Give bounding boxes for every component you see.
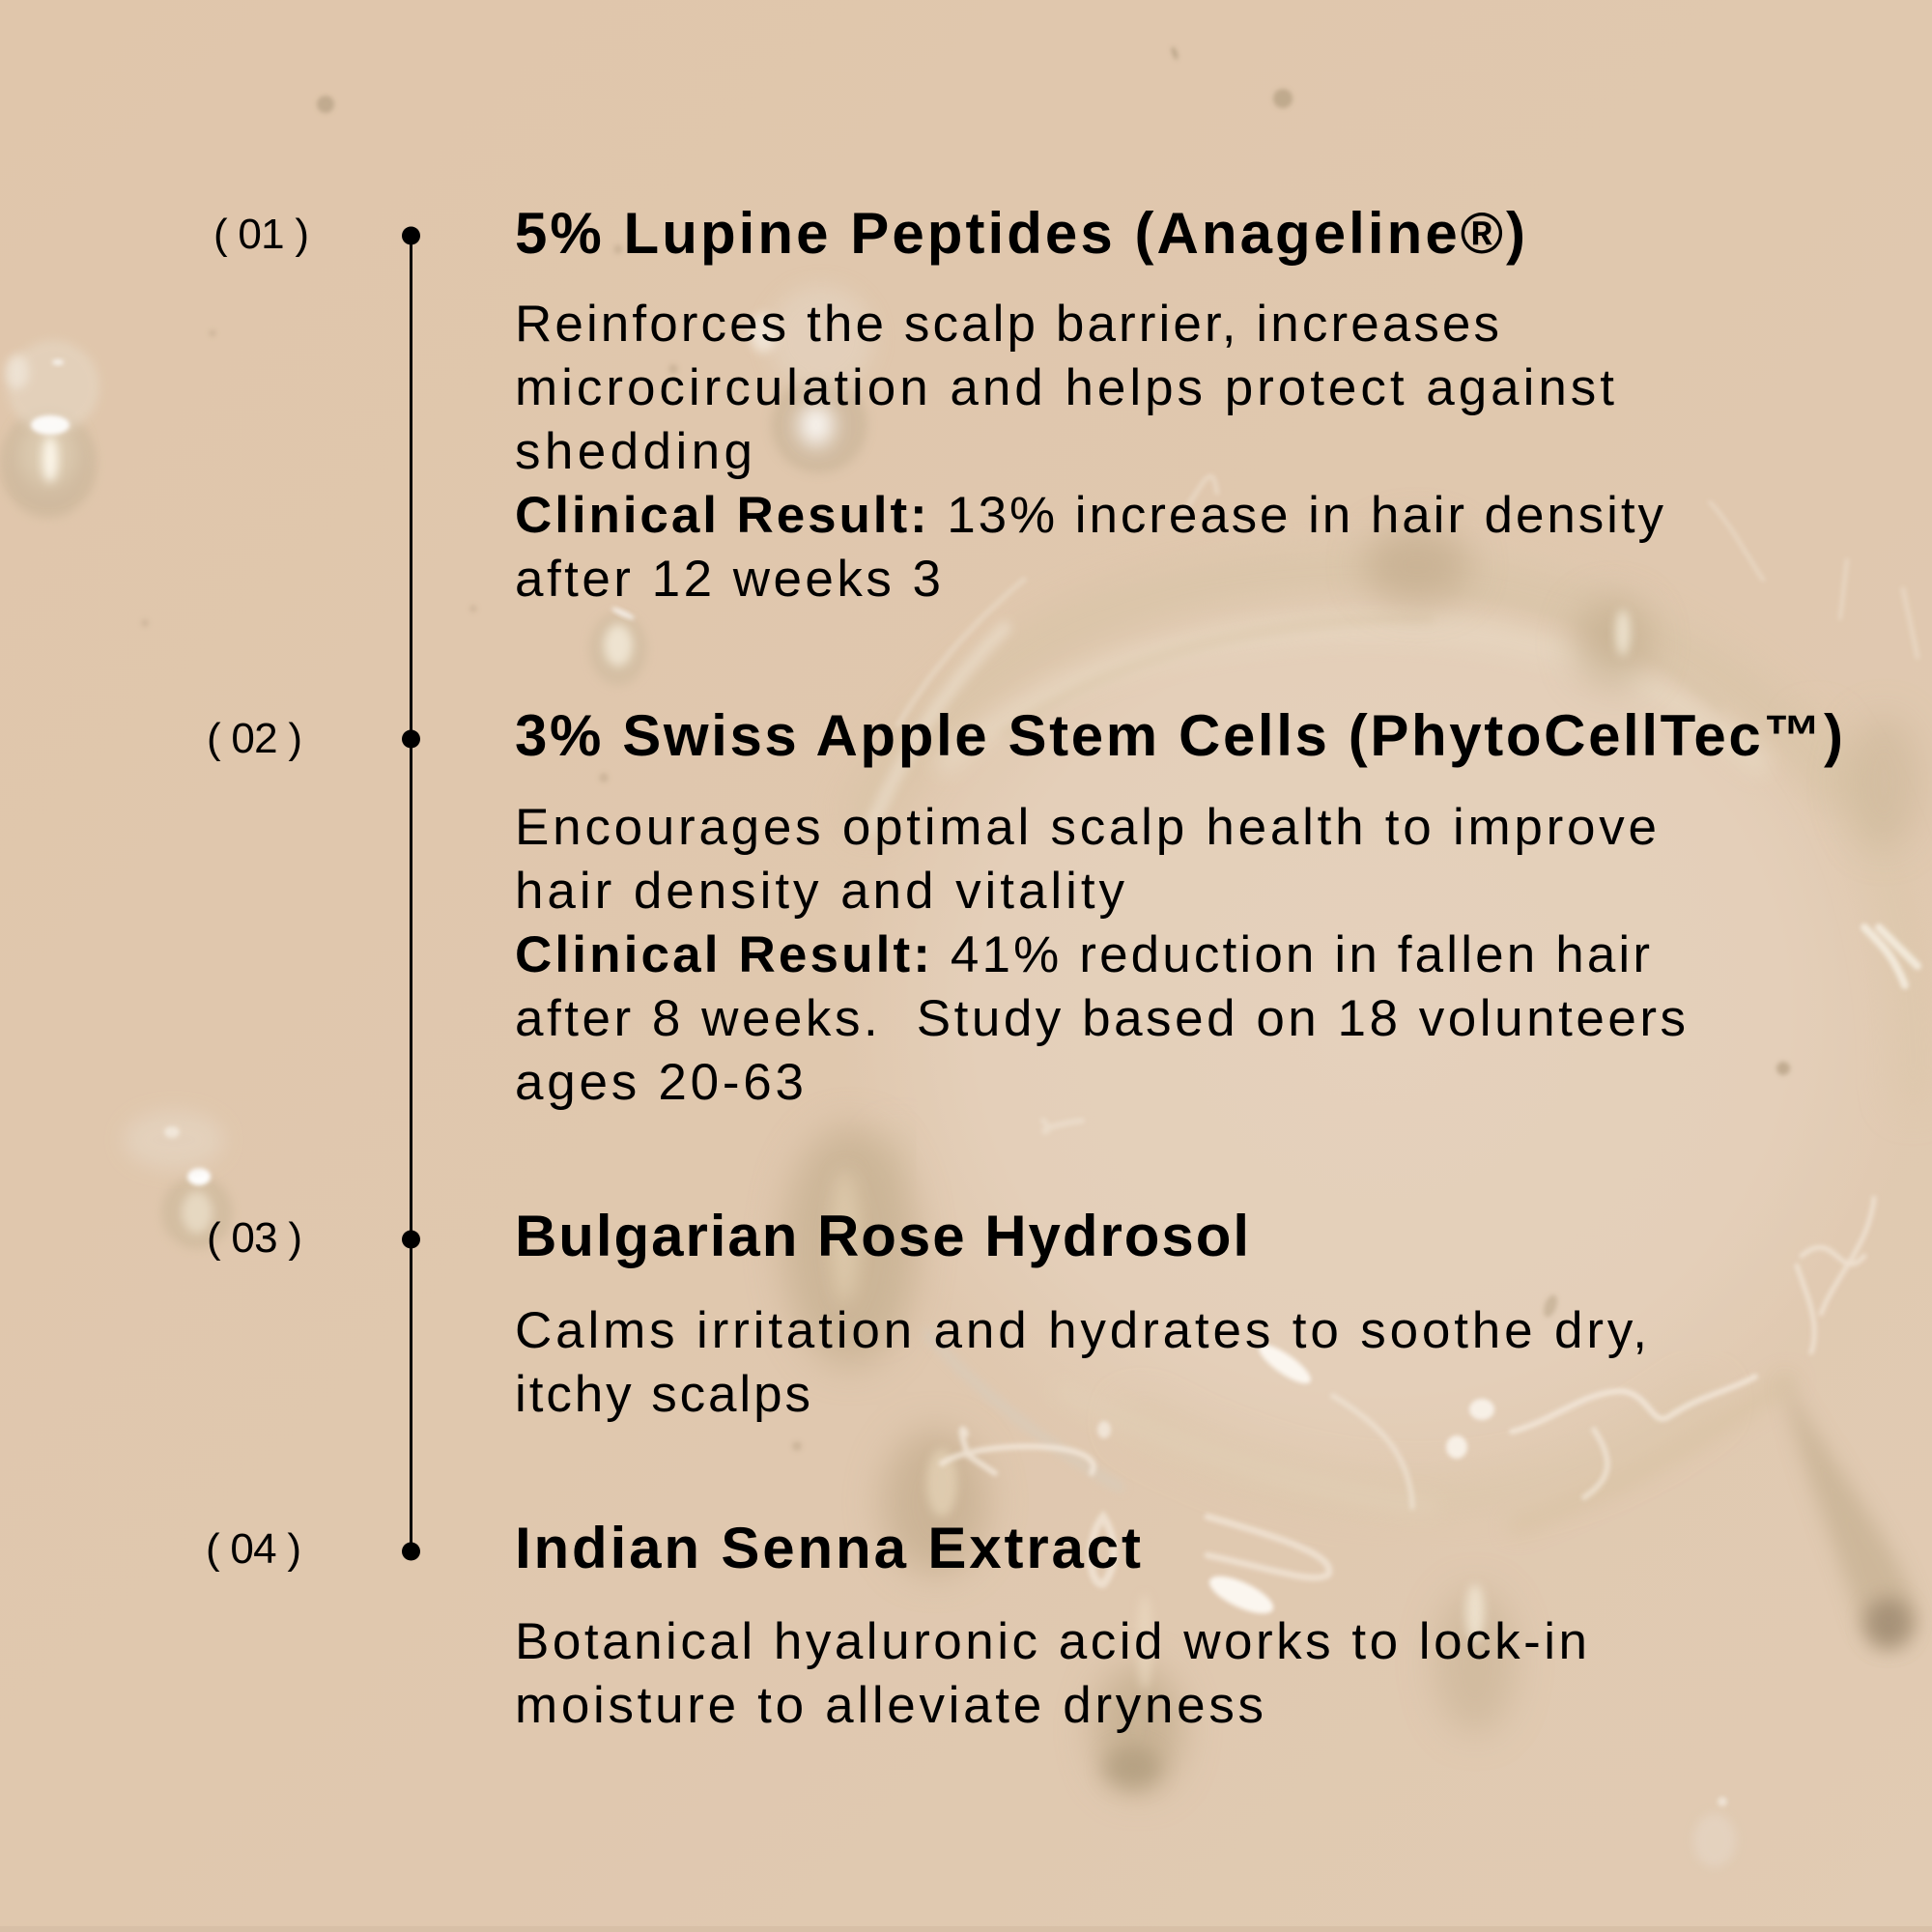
- body text: Clinical Result: 13% increase in hair density: [515, 487, 1664, 544]
- tear-shaped drips: [1782, 1372, 1918, 1648]
- item 3: Bulgarian Rose Hydrosol: [515, 1204, 1647, 1423]
- dark specks: [141, 46, 1790, 1451]
- body text: [515, 296, 1664, 608]
- body text: Calms irritation and hydrates to soothe dry,: [515, 1302, 1647, 1359]
- body text: [515, 799, 1686, 1111]
- item 4: Indian Senna Extract: [515, 1516, 1587, 1734]
- body text: Clinical Result: 41% reduction in fallen hair: [515, 926, 1650, 983]
- body text: hair density and vitality: [515, 863, 1124, 920]
- body text: microcirculation and helps protect against: [515, 359, 1614, 416]
- droplet: behind heading one: [750, 285, 874, 473]
- body text: Encourages optimal scalp health to improve: [515, 799, 1657, 856]
- body text: ages 20-63: [515, 1054, 804, 1111]
- timeline rail with dots: [402, 226, 420, 1561]
- heading: 5% Lupine Peptides (Anageline®): [515, 201, 1525, 266]
- body text: after 8 weeks. Study based on 18 volunteers: [515, 990, 1686, 1047]
- body text: [515, 1613, 1587, 1734]
- number 02: ( 02 ): [207, 715, 302, 762]
- dark blurred splash masses: [782, 526, 1922, 1792]
- item 1: Lupine Peptides: [515, 201, 1664, 608]
- white highlights and streaks: [1097, 1338, 1494, 1621]
- splash ring: [864, 570, 1913, 1526]
- heading: 3% Swiss Apple Stem Cells (PhytoCellTec™): [515, 703, 1843, 768]
- body text: shedding: [515, 423, 753, 480]
- body text: after 12 weeks 3: [515, 551, 941, 608]
- heading: Bulgarian Rose Hydrosol: [515, 1204, 1249, 1268]
- number 04: ( 04 ): [206, 1525, 301, 1573]
- item 2: Swiss Apple Stem Cells: [515, 703, 1843, 1111]
- droplet: lower right: [1693, 1797, 1736, 1867]
- droplet: beneath first item: [589, 606, 647, 686]
- body text: Botanical hyaluronic acid works to lock-in: [515, 1613, 1587, 1670]
- number 03: ( 03 ): [207, 1214, 302, 1262]
- number 01: ( 01 ): [213, 211, 309, 258]
- droplet: left of third item: [124, 1111, 233, 1249]
- body text: moisture to alleviate dryness: [515, 1677, 1264, 1734]
- droplet: left edge: [0, 340, 99, 518]
- heading: Indian Senna Extract: [515, 1516, 1141, 1580]
- body text: itchy scalps: [515, 1366, 810, 1423]
- body text: [515, 1302, 1647, 1423]
- body text: Reinforces the scalp barrier, increases: [515, 296, 1499, 353]
